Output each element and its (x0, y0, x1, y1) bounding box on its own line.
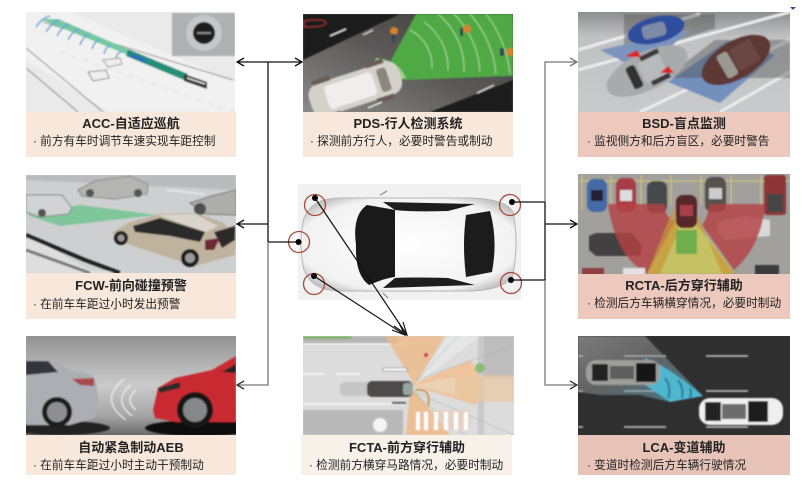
caption: ACC (26, 112, 236, 157)
caption: LCA: LCA-变道辅助 (642, 440, 726, 455)
caption: BSD: · 监视侧方和后方盲区，必要时警告 (587, 134, 769, 148)
panel: LCA lane change assist (578, 336, 790, 475)
sensor circles (288, 194, 522, 294)
image: ACC road scene (26, 12, 235, 112)
arrows: right connector (511, 58, 577, 389)
panel: RCTA rear cross traffic (578, 174, 790, 319)
maroon car (701, 34, 771, 86)
panel: AEB automatic emergency braking (26, 336, 236, 475)
beige car (113, 213, 236, 266)
image: PDS scene (303, 14, 513, 112)
caption: AEB: · 在前车车距过小时主动干预制动 (33, 458, 204, 472)
caption: FCW: FCW-前向碰撞预警 (75, 278, 187, 293)
silver car (606, 44, 688, 97)
icon: dashboard inset (172, 13, 235, 56)
caption: FCTA: · 检测前方横穿马路情况，必要时制动 (309, 458, 503, 472)
caption: LCA (578, 435, 790, 475)
panel: BSD blind spot (578, 10, 790, 157)
panel: FCTA front cross traffic (301, 336, 514, 475)
caption: ACC: · 前方有车时调节车速实现车距控制 (33, 134, 215, 148)
image: LCA scene (578, 336, 790, 435)
caption: RCTA: · 检测后方车辆横穿情况，必要时制动 (587, 296, 781, 310)
caption: ACC: ACC-自适应巡航 (82, 116, 180, 131)
caption: BSD (578, 112, 790, 157)
decorative top-right mark (790, 7, 796, 10)
caption: PDS (303, 112, 513, 157)
image: RCTA scene (578, 174, 790, 276)
silver car (26, 358, 99, 425)
caption: RCTA (578, 274, 790, 319)
panel: FCW forward collision warning (26, 175, 236, 319)
image: AEB scene (26, 336, 236, 435)
caption: FCTA: FCTA-前方穿行辅助 (349, 440, 465, 455)
image: BSD scene (578, 10, 790, 112)
caption: FCW: · 在前车车距过小时发出预警 (33, 297, 181, 311)
caption: BSD: BSD-盲点监测 (642, 116, 726, 131)
blue car (627, 14, 685, 45)
caption: AEB: 自动紧急制动AEB (78, 440, 184, 455)
caption: RCTA: RCTA-后方穿行辅助 (625, 278, 743, 293)
caption: PDS: · 探测前方行人，必要时警告或制动 (310, 134, 493, 148)
panel: PDS pedestrian detection (303, 14, 514, 157)
caption: FCTA (301, 435, 512, 475)
caption: PDS: PDS-行人检测系统 (353, 116, 463, 131)
image: FCTA scene (303, 336, 514, 435)
central car with sensors (288, 184, 522, 300)
caption: AEB (26, 435, 236, 475)
panel: ACC adaptive cruise (26, 12, 236, 157)
caption: FCW (26, 273, 236, 319)
arrows: sensors to FCTA (314, 198, 407, 335)
image: FCW scene (26, 175, 236, 273)
sensor dots (296, 195, 515, 283)
arrows: left connector (237, 58, 302, 389)
caption: LCA: · 变道时检测后方车辆行驶情况 (587, 458, 746, 472)
red car (153, 356, 236, 422)
car top view (301, 191, 516, 298)
